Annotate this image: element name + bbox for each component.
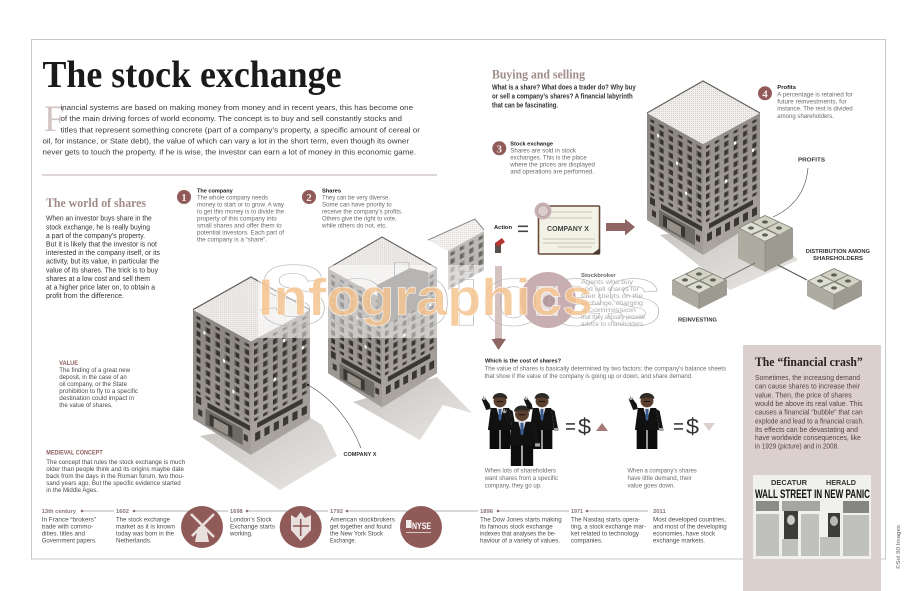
callout: medieval concept: The concept that rules the stock exchange is much <box>46 459 185 466</box>
stockbroker text <box>581 273 646 328</box>
figure: single shareholder <box>629 393 664 449</box>
intro text block: of the main driving forces of world economy. The concept is to buy and sell constantly stocks and <box>60 114 402 123</box>
step 3: stock exchange: and operations are performed. <box>510 168 594 175</box>
stockbroker text: Agents who buy <box>581 279 634 286</box>
watermark: outlined word: Sabioes <box>258 248 663 344</box>
step 4: profits <box>758 85 853 120</box>
callout: value: deposit, in the case of an <box>59 374 127 381</box>
step 2: shares: Others give the right to vote, <box>322 216 397 223</box>
number badge 1: 1 <box>181 192 187 204</box>
icon: stamp <box>495 238 505 253</box>
entry: 2011: economies, have stock <box>653 531 716 538</box>
step 4: profits: among shareholders. <box>777 113 834 120</box>
number badge 4: 4 <box>762 88 768 100</box>
label: profits: PROFITS <box>798 158 825 164</box>
text: world of shares: stock exchange, he is really buying <box>46 224 150 231</box>
step 4: profits: Profits <box>777 85 796 91</box>
arrow: to shareholders <box>778 265 807 280</box>
callout: value: oil company, or the State <box>59 381 127 388</box>
section: cost of shares: that show if the value of the company is going up or down, and share demand. <box>484 373 693 380</box>
entry: 1698: 1698 <box>230 509 243 515</box>
section: cost of shares: The value of shares is basically determined by two factors: the company’s balance sheets <box>484 366 726 372</box>
intro text block: never gets to touch the property. If he is wise, the investor can earn a lot of money in this economic game. <box>42 148 416 156</box>
panel: financial crash <box>743 345 881 591</box>
stockbroker text: that they actually provide <box>581 314 646 321</box>
callout: value: destination could impact in <box>59 395 134 402</box>
newspaper front page: DECATUR <box>771 478 808 487</box>
arrow: to building <box>606 219 635 236</box>
entry: 1896: haviour of a variety of values. <box>480 538 560 545</box>
entry: 1698: London’s Stock <box>230 517 272 524</box>
step 2: shares: receive the company’s profits. <box>322 209 403 216</box>
caption: demand down: have little demand, their <box>628 475 692 482</box>
icon: coat of arms <box>280 506 322 548</box>
entry: 13th century: 13th century <box>42 509 77 515</box>
text: financial crash explanation: can cause shares to increase their <box>755 384 861 391</box>
equation: price down <box>674 414 715 439</box>
entry: 1971 <box>571 509 646 545</box>
entry: 1792 <box>330 509 395 545</box>
step 1: the company <box>177 189 285 244</box>
caption: demand down: When a company’s shares <box>628 468 697 475</box>
entry: 1896: The Dow Jones starts making <box>480 517 562 524</box>
arrow: down to cost of shares <box>492 266 506 350</box>
text: world of shares: a part of the company’s property. <box>46 233 145 240</box>
equation: price up: $ <box>578 414 591 439</box>
entry: 1602: 1602 <box>116 509 129 515</box>
step 2: shares <box>302 189 403 230</box>
stockbroker text: Stockbroker <box>581 273 616 279</box>
entry: 1971: ket related to technology <box>571 531 640 538</box>
entry: 1602: Netherlands. <box>116 538 152 545</box>
building chunk: one share <box>428 219 484 290</box>
entry: 1698: Exchange starts <box>230 524 275 531</box>
caption: demand up: company, they go up. <box>485 482 542 489</box>
text: buying and selling intro: that can be fascinating. <box>492 103 558 110</box>
section: cost of shares <box>482 359 726 489</box>
text: world of shares: But it is likely that the investor is not <box>46 242 157 248</box>
step 1: the company: money to start or to grow. A way <box>197 202 285 209</box>
drop cap: F <box>44 99 65 140</box>
step 3: stock exchange: where the prices are displayed <box>509 161 596 168</box>
entry: 1971: companies. <box>571 538 603 545</box>
callout: medieval concept: back from the days in the Roman forum, two thou- <box>46 473 184 480</box>
text: world of shares: shares at a low cost and sell them <box>46 276 150 283</box>
step 1: the company: the company is a “share”. <box>197 237 267 244</box>
step 1: the company: to get this money is to divide the <box>197 209 285 216</box>
entry: 1896 <box>480 509 562 545</box>
intro text block <box>42 99 420 156</box>
caption: demand up: When lots of shareholders <box>485 468 556 475</box>
action equation: Action <box>494 225 512 231</box>
text: world of shares: activity, but its value, in particular the <box>46 259 159 266</box>
pale band over artwork <box>258 265 592 338</box>
timeline <box>42 506 727 548</box>
entry: 1792: the New York Stock <box>330 531 384 538</box>
text: world of shares: at a higher price later on, to obtain a <box>46 284 155 292</box>
entry: 1896: 1896 <box>480 509 494 515</box>
entry: 1971: 1971 <box>571 509 584 515</box>
entry: 1971: ting, a stock exchange mar- <box>571 524 646 531</box>
credit: ©Sol 90 Images <box>895 525 902 569</box>
label: distribution among shareholders <box>806 249 870 262</box>
newspaper front page: HERALD <box>826 478 857 487</box>
leader and label: company X <box>307 384 377 458</box>
entry: 13th century <box>42 509 97 545</box>
entry: 2011: 2011 <box>653 509 666 515</box>
entry: 2011: and most of the developing <box>653 524 727 531</box>
entry: 1792: Exchange. <box>330 538 356 545</box>
entry: 13th century: dities, titles and <box>42 531 85 538</box>
certificate: company X: COMPANY X <box>547 226 589 233</box>
callout: medieval concept: in the Middle Ages. <box>46 487 98 494</box>
text: world of shares: value of its shares. The trick is to buy <box>46 267 158 274</box>
step 2: shares: Some can have priority to <box>322 202 392 209</box>
title: The stock exchange <box>42 54 342 96</box>
stockbroker text: and sell shares for <box>581 286 639 293</box>
icon: NYSE logo: NYSE <box>412 521 431 532</box>
label: distribution among shareholders: SHAREHOLDERS <box>813 256 863 262</box>
cash: distribution <box>807 268 862 310</box>
entry: 2011 <box>653 509 727 545</box>
entry: 13th century: trade with commo- <box>42 524 93 531</box>
text: financial crash explanation: explode and lead to a financial crash. <box>755 418 864 425</box>
building: with share removed <box>328 237 472 440</box>
step 4: profits: future reinvestments, for <box>777 99 847 106</box>
number badge 2: 2 <box>306 192 312 204</box>
step 2: shares: while others do not, etc. <box>321 223 387 230</box>
entry: 1971: The Nasdaq starts opera- <box>571 517 640 524</box>
cash: reinvesting <box>672 267 727 309</box>
entry: 1896: indexes that analyses the be- <box>480 531 556 538</box>
building: company X <box>193 277 337 490</box>
text: world of shares: interested in the company itself, or its <box>46 250 160 257</box>
stockbroker text: exchange, charging <box>581 300 644 307</box>
text: buying and selling intro: or sell a company’s shares? A financial labyrinth <box>492 94 633 101</box>
callout: value: the value of shares. <box>59 402 113 409</box>
step 1: the company: property of this company into <box>197 216 277 223</box>
cash: profits pile <box>738 215 793 272</box>
icon: NYSE logo <box>400 506 442 548</box>
entry: 13th century: Government papers. <box>42 538 97 545</box>
entry: 1792: 1792 <box>330 509 343 515</box>
callout: medieval concept: MEDIEVAL CONCEPT <box>46 451 103 457</box>
intro text block: titles that represent something concrete (part of a company’s property, a specific amount of cereal or <box>60 126 420 134</box>
entry: 1602: The stock exchange <box>116 517 170 524</box>
heading: financial crash: The “financial crash” <box>755 354 863 369</box>
callout: value: prohibition to fly to a specific <box>59 388 139 395</box>
entry: 1602: today was born in the <box>116 531 174 538</box>
arrow: to reinvesting <box>724 263 755 279</box>
step 3: stock exchange <box>492 141 596 175</box>
heading: the world of shares: The world of shares <box>46 195 146 210</box>
step 1: the company: small shares and offer them to <box>197 223 282 230</box>
leader and label: company X: COMPANY X <box>344 452 377 458</box>
step 1: the company: The company <box>197 189 233 195</box>
callout: medieval concept: sand years ago. But the specific evidence started <box>46 480 181 487</box>
certificate: company X <box>534 202 600 254</box>
intro text block: inancial systems are based on making money from money and in recent years, this has become one <box>60 103 413 112</box>
callout: value: VALUE <box>59 361 78 367</box>
caption: demand down: value goes down. <box>628 482 675 489</box>
action equation <box>494 202 635 254</box>
step 3: stock exchange: Shares are sold in stock <box>510 147 577 154</box>
caption: demand up <box>484 468 558 489</box>
entry: 1792: get together and found <box>330 524 392 531</box>
intro text block: oil, for instance, or State debt), the value of which can vary a lot in the short term, even though its owner <box>42 136 409 146</box>
text: financial crash explanation: have worldwide consequences, like <box>755 435 861 442</box>
watermark: Infographics: Infographics <box>258 269 593 327</box>
heading: buying and selling: Buying and selling <box>492 67 586 81</box>
step 3: stock exchange: exchanges. This is the place <box>510 154 587 161</box>
entry: 2011: exchange markets. <box>653 538 705 545</box>
text: financial crash explanation: Sometimes, the increasing demand <box>755 375 860 382</box>
text: financial crash explanation <box>754 375 864 450</box>
section: cost of shares: Which is the cost of shares? <box>485 359 561 365</box>
building: profits <box>647 81 798 290</box>
entry: 1698: working. <box>229 531 253 538</box>
label: reinvesting: REINVESTING <box>678 318 717 324</box>
stockbroker text: advice to shareholders. <box>581 321 645 328</box>
step 2: shares: Shares <box>322 189 341 195</box>
entry: 13th century: In France “brokers” <box>42 517 96 524</box>
caption: demand down <box>628 468 697 489</box>
step 4: profits: instance. The rest is divided <box>777 106 853 113</box>
entry: 2011: Most developed countries, <box>653 517 726 524</box>
text: financial crash explanation: causes a financial “bubble” that can <box>755 410 863 417</box>
newspaper front page: WALL STREET IN NEW PANIC <box>755 489 870 501</box>
step 1: the company: potential investors. Each part of <box>197 230 284 237</box>
callout: medieval concept <box>46 451 185 494</box>
text: world of shares: profit from the difference. <box>46 293 124 300</box>
caption: demand up: want shares from a specific <box>484 475 558 482</box>
figures: many shareholders <box>482 393 559 466</box>
callout: value <box>59 361 139 409</box>
leader: profits <box>773 168 808 217</box>
entry: 1698 <box>229 509 275 538</box>
number badge 3: 3 <box>497 143 503 155</box>
step 1: the company: The whole company needs <box>197 195 268 202</box>
text: world of shares <box>46 216 160 300</box>
step 3: stock exchange: Stock exchange <box>510 141 554 147</box>
text: financial crash explanation: in 1929 (picture) and in 2008. <box>755 443 839 450</box>
text: buying and selling intro <box>492 84 636 110</box>
equation: price down: $ <box>686 414 699 439</box>
stockbroker icon <box>520 272 576 328</box>
stockbroker text: a commission <box>581 307 637 314</box>
text: buying and selling intro: What is a share? What does a trader do? Why buy <box>492 84 636 91</box>
label: distribution among shareholders: DISTRIBUTION AMONG <box>806 249 870 255</box>
stockbroker text: their clients on the <box>581 293 644 300</box>
text: financial crash explanation: would be above its real value. This <box>754 401 863 408</box>
entry: 1792: American stockbrokers <box>330 517 395 524</box>
step 2: shares: They can be very diverse. <box>322 195 390 202</box>
entry: 1602: market as it is known <box>116 524 175 531</box>
entry: 1896: its famous stock exchange <box>480 524 553 531</box>
step 4: profits: A percentage is retained for <box>777 92 853 99</box>
text: world of shares: When an investor buys share in the <box>46 216 152 223</box>
equation: price up <box>566 414 608 439</box>
entry: 1602 <box>116 509 175 545</box>
callout: value: The finding of a great new <box>59 367 130 374</box>
text: financial crash explanation: value. Then, the price of shares <box>755 392 852 399</box>
newspaper front page <box>753 475 871 559</box>
icon: windmill <box>181 506 223 548</box>
callout: medieval concept: older than people think and its origins maybe date <box>46 466 184 473</box>
text: financial crash explanation: Its effects can be devastating and <box>755 427 858 434</box>
equals sign <box>518 226 528 232</box>
